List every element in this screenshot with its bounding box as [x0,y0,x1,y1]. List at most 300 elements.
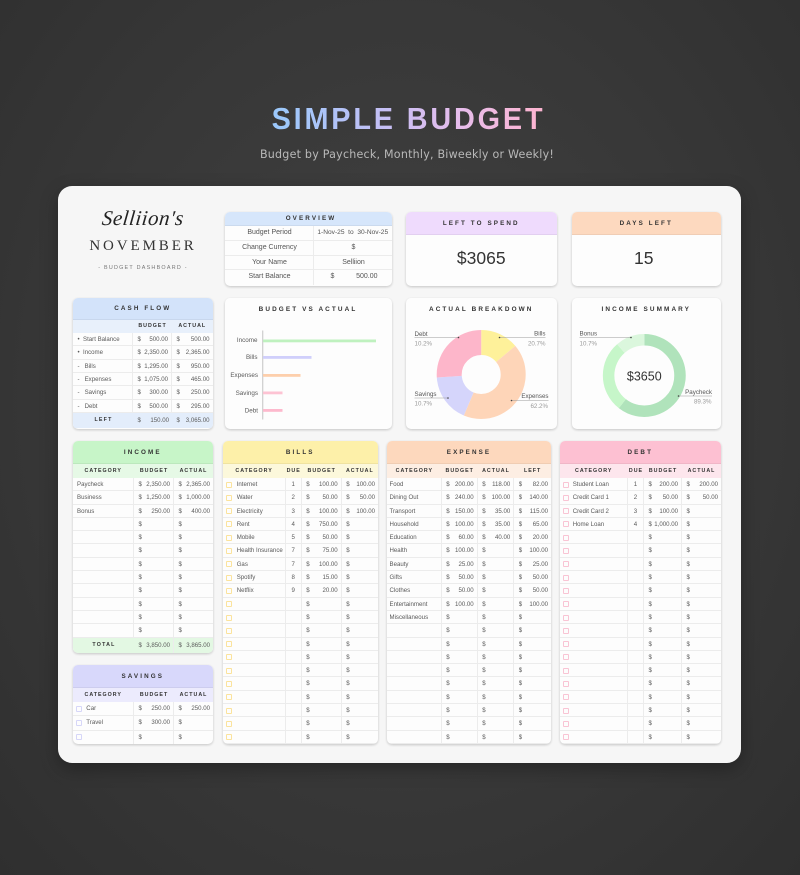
bills table: $ [346,534,350,541]
expense table: $ [446,547,450,554]
bills table: $ [346,601,350,608]
donut chart: income summary: 89.3% [694,398,712,405]
panel: savings [72,664,213,744]
expense table: $ [482,627,486,634]
cash flow table: $ [176,336,180,343]
cash flow table: LEFT [94,417,113,423]
debt table: $ [686,561,690,568]
donut chart: income summary: $3650 [627,369,662,383]
bills table: $ [346,481,350,488]
cash flow table: 2,350.00 [144,349,168,356]
cash flow table: 500.00 [149,336,168,343]
bills table: Rent [237,521,250,528]
expense table: $ [446,641,450,648]
expense table: 60.00 [458,534,474,541]
expense table: $ [519,641,522,648]
expense table: $ [482,601,486,608]
income heading [72,441,213,464]
debt table: $ [648,614,652,621]
overview rows: Budget Period [247,229,292,236]
cash flow table: • Income [78,349,103,356]
cash flow table: $ [138,417,141,424]
bills table: $ [306,720,310,727]
expense table: $ [482,481,486,488]
cash flow table: $ [138,363,141,370]
debt table: DUE [629,468,643,474]
debt table [560,464,721,744]
expense table: LEFT [524,468,541,474]
cash flow table: - Debt [78,403,97,410]
income table: $ [178,508,182,515]
income table: $ [138,574,142,581]
cash flow table: 500.00 [191,336,210,343]
income table: 1,000.00 [186,494,210,501]
cash flow table: ACTUAL [178,322,206,328]
donut chart: income summary: Paycheck [685,388,713,396]
month: NOVEMBER [89,238,197,254]
income table: Paycheck [77,481,103,488]
left to spend heading: LEFT TO SPEND [443,220,520,227]
bills table: $ [346,667,350,674]
expense table: $ [519,694,522,701]
expense table: $ [519,601,522,608]
bills table: 1 [291,481,295,488]
overview rows: Start Balance [248,273,291,280]
income table: $ [178,481,182,488]
expense table: 118.00 [492,481,510,488]
savings table: 250.00 [191,705,210,712]
savings table: Car [86,705,96,712]
cash flow table: 300.00 [149,389,168,396]
cash flow table: - Bills [78,363,96,370]
budget vs actual heading: BUDGET VS ACTUAL [259,306,357,313]
days left value: 15 [634,248,653,268]
bills table: $ [306,667,310,674]
donut chart: income summary: 10.7% [580,340,598,347]
expense table: $ [446,667,450,674]
expense table: $ [482,734,486,741]
expense table: $ [446,494,450,501]
savings table: $ [138,719,142,726]
expense table: 115.00 [530,508,548,515]
expense table: $ [519,734,522,741]
debt table: $ [686,481,690,488]
expense table: $ [446,601,450,608]
income table: $ [178,601,182,608]
bills table: $ [346,587,350,594]
income table: 3,850.00 [146,642,170,649]
income table: $ [178,574,182,581]
bills table: 9 [291,587,295,594]
expense table: $ [519,587,522,594]
expense table: Miscellaneous [390,614,428,621]
savings table: $ [138,705,142,712]
debt table: $ [686,521,690,528]
expense table: 65.00 [533,521,548,528]
bills table: $ [306,521,310,528]
cash flow table: - Savings [78,389,106,396]
savings table: $ [178,719,182,726]
bar chart: Bills [245,354,257,360]
income table: $ [138,534,142,541]
cash flow heading: CASH FLOW [114,305,171,312]
bills table: $ [346,561,350,568]
income table [73,464,213,653]
expense table: 100.00 [455,547,474,554]
expense table: 82.00 [533,481,548,488]
expense table: $ [482,494,486,501]
days left heading [572,212,720,235]
dashboard label: - BUDGET DASHBOARD - [98,265,188,271]
debt table: $ [648,561,652,568]
subtitle: Budget by Paycheck, Monthly, Biweekly or Weekly! [260,148,554,160]
debt table: CATEGORY [575,468,612,474]
expense table: BUDGET [446,468,474,474]
expense table: $ [519,494,522,501]
savings table: $ [138,734,142,741]
expense table: 140.00 [529,494,548,501]
expense table: CATEGORY [396,468,433,474]
debt table: $ [686,508,690,515]
bills table: $ [306,734,310,741]
debt table: $ [648,667,652,674]
bills table: 20.00 [322,587,338,594]
debt table: $ [686,601,690,608]
bills table: $ [306,547,310,554]
bills table [223,464,378,744]
bills table: 7 [291,561,295,568]
panel: actual breakdown [406,298,557,428]
expense table: Education [390,534,417,541]
income table: 250.00 [151,508,170,515]
debt table: $ [686,547,690,554]
donut chart: actual breakdown: 62.2% [530,402,548,410]
expense table: $ [446,561,450,568]
debt table: $ [686,494,690,501]
expense table: $ [519,707,522,714]
bills table: 50.00 [360,494,375,501]
expense table: $ [519,667,522,674]
bills heading: BILLS [286,449,315,456]
cash flow table: $ [138,336,141,343]
bar chart: Income [236,336,257,344]
bills table: 3 [291,508,295,515]
debt table: 100.00 [659,508,678,515]
debt table: $ [686,614,690,621]
cash flow table: $ [138,403,141,410]
left to spend value: $3065 [457,248,506,268]
debt heading: DEBT [627,449,653,456]
bills table: 750.00 [319,521,338,528]
debt table: 4 [634,521,637,528]
expense table: $ [519,614,522,621]
debt table: 200.00 [699,481,718,488]
panel: overview [224,212,392,286]
overview rows: Change Currency [242,244,297,251]
expense table: $ [519,534,522,541]
donut chart: actual breakdown: Savings [414,390,436,398]
bills table: 5 [291,534,295,541]
expense table: ACTUAL [482,468,510,474]
bills table: 4 [291,521,295,528]
panel: budget vs actual [224,298,392,428]
bills table: $ [346,734,350,741]
income table: $ [178,642,182,649]
bills table: $ [346,707,350,714]
bills table: $ [346,694,350,701]
overview rows: Selliion [342,259,365,266]
donut chart: actual breakdown: Debt [414,330,427,338]
cash flow table [73,320,213,428]
cash flow table: $ [138,389,141,396]
income table: $ [138,614,142,621]
bar chart: Savings [235,390,258,396]
bills table: $ [306,654,310,661]
expense table: $ [519,547,522,554]
expense table: $ [446,654,450,661]
bills table: Internet [237,481,257,488]
debt table: $ [686,627,690,634]
expense table: Clothes [390,587,410,594]
savings table: $ [178,734,182,741]
expense table: $ [482,654,486,661]
expense table: $ [446,534,450,541]
debt table: $ [648,587,652,594]
bills table: $ [346,680,350,687]
expense table: $ [482,508,486,515]
cash flow table: $ [176,376,180,383]
cash flow table: $ [176,417,180,424]
bar chart [230,330,376,420]
cash flow table: $ [176,389,180,396]
expense table: $ [482,534,486,541]
expense table: $ [519,481,522,488]
bills table: $ [306,494,310,501]
debt table: $ [648,521,652,528]
panel: debt [560,441,721,744]
debt table: $ [648,481,652,488]
expense table: 35.00 [495,521,510,528]
expense table: $ [519,654,522,661]
expense table: 200.00 [455,481,474,488]
debt table: $ [648,654,652,661]
expense table: 50.00 [458,574,474,581]
actual breakdown heading: ACTUAL BREAKDOWN [429,306,533,313]
cash flow table: 500.00 [149,403,168,410]
expense table: $ [482,641,486,648]
debt table: Student Loan [573,481,609,488]
dashboard card [58,186,741,763]
income table: BUDGET [140,468,168,474]
bills table: $ [306,587,310,594]
expense table: $ [519,720,522,727]
debt table: 3 [634,508,637,515]
expense table: $ [482,547,486,554]
expense table: $ [482,694,486,701]
cash flow table: • Start Balance [78,336,120,343]
donut chart: actual breakdown: Bills [534,330,545,337]
bills table: $ [346,508,350,515]
income table: $ [178,547,182,554]
bar chart: Expenses [230,372,258,378]
expense table: 50.00 [533,574,548,581]
panel: income [72,441,213,652]
debt table: 2 [634,494,637,501]
expense table: $ [482,614,486,621]
bills table: $ [346,547,350,554]
bills table: $ [346,654,350,661]
expense table: $ [482,587,486,594]
debt table: $ [648,534,652,541]
expense table: $ [482,561,486,568]
overview heading: OVERVIEW [286,215,336,222]
cash flow table: $ [138,349,141,356]
cash flow table: BUDGET [138,322,167,328]
savings heading: SAVINGS [121,673,164,680]
overview rows [225,226,392,285]
expense table: Food [390,481,403,488]
debt table: $ [648,574,652,581]
expense table: Health [390,547,407,554]
cash flow table: 250.00 [191,389,210,396]
bills table: Electricity [237,508,263,515]
savings table: $ [178,705,182,712]
expense table [387,464,551,744]
donut chart: actual breakdown: Expenses [521,392,548,400]
debt table: 50.00 [703,494,718,501]
income table: $ [138,521,142,528]
income table: TOTAL [92,642,116,648]
debt table: $ [686,574,690,581]
income table: 1,250.00 [146,494,170,501]
expense table: 100.00 [492,494,510,501]
cash flow table: $ [176,349,180,356]
expense table: $ [519,680,522,687]
bills table: 50.00 [322,534,338,541]
bills table: $ [346,521,350,528]
income table: CATEGORY [85,468,122,474]
savings table: BUDGET [140,692,168,698]
income table: $ [138,587,142,594]
expense table: $ [446,707,450,714]
expense table: Beauty [390,561,408,568]
income table: 3,865.00 [186,642,210,649]
debt heading [560,441,721,464]
donut chart: income summary: Bonus [580,330,597,337]
cash flow table: 1,295.00 [144,363,168,370]
cash flow table: 2,365.00 [186,349,210,356]
bills table: 100.00 [319,508,338,515]
bills table: 15.00 [322,574,338,581]
income table: $ [178,627,182,634]
overview rows: $ [330,273,334,280]
bills heading [222,441,378,464]
income table: $ [138,561,142,568]
bills table: $ [306,614,310,621]
bills table: $ [306,641,310,648]
income table: 2,350.00 [146,481,170,488]
income table: $ [138,642,142,649]
bills table: $ [306,534,310,541]
days left heading: DAYS LEFT [620,220,673,227]
bills table: Netflix [237,587,254,594]
debt table: BUDGET [649,468,677,474]
bills table: $ [306,481,310,488]
debt table: $ [648,641,652,648]
bills table: ACTUAL [346,468,374,474]
debt table: $ [648,707,652,714]
expense table: $ [446,508,450,515]
bills table: 100.00 [356,508,375,515]
bar chart: Debt [244,407,258,414]
expense table: 50.00 [533,587,548,594]
bills table: 8 [291,574,295,581]
cash flow table: 295.00 [191,403,210,410]
expense table: $ [482,574,486,581]
bills table: 100.00 [319,561,338,568]
bills table: $ [306,627,310,634]
expense table: $ [482,720,486,727]
donut chart: income summary [580,330,713,417]
expense table: 50.00 [458,587,474,594]
debt table: $ [686,720,690,727]
expense table: $ [446,587,450,594]
debt table: 200.00 [659,481,678,488]
income table: 400.00 [191,508,210,515]
debt table: $ [686,587,690,594]
debt table: $ [648,508,652,515]
expense heading: EXPENSE [447,449,491,456]
bills table: $ [306,680,310,687]
debt table: 1,000.00 [654,521,678,528]
expense table: 100.00 [529,601,548,608]
expense table: $ [446,720,450,727]
expense table: 40.00 [495,534,510,541]
expense table: $ [519,627,522,634]
expense table: $ [446,734,450,741]
expense table: 25.00 [533,561,548,568]
income table: $ [138,547,142,554]
panel: expense [387,441,551,744]
bills table: BUDGET [308,468,336,474]
expense table: $ [519,521,522,528]
debt table: $ [686,654,690,661]
bills table: $ [346,627,350,634]
expense table: $ [519,574,522,581]
savings table: 300.00 [151,719,170,726]
income table: $ [178,561,182,568]
debt table: ACTUAL [688,468,715,474]
debt table: $ [648,547,652,554]
expense table: $ [446,614,450,621]
donut chart: actual breakdown [414,330,548,419]
expense table: $ [446,574,450,581]
bills table: Gas [237,561,248,568]
savings table: Travel [86,719,103,726]
title: SIMPLE BUDGET [272,102,545,136]
panel: bills [222,441,378,744]
expense table: 100.00 [529,547,548,554]
cash flow table: 3,065.00 [186,417,210,424]
income heading: INCOME [124,449,162,456]
expense table: $ [482,707,486,714]
bills table: $ [306,694,310,701]
debt table: Home Loan [573,521,604,528]
bills table: $ [346,574,350,581]
bills table: $ [306,574,310,581]
overview rows: 500.00 [356,273,378,280]
expense table: 20.00 [533,534,548,541]
